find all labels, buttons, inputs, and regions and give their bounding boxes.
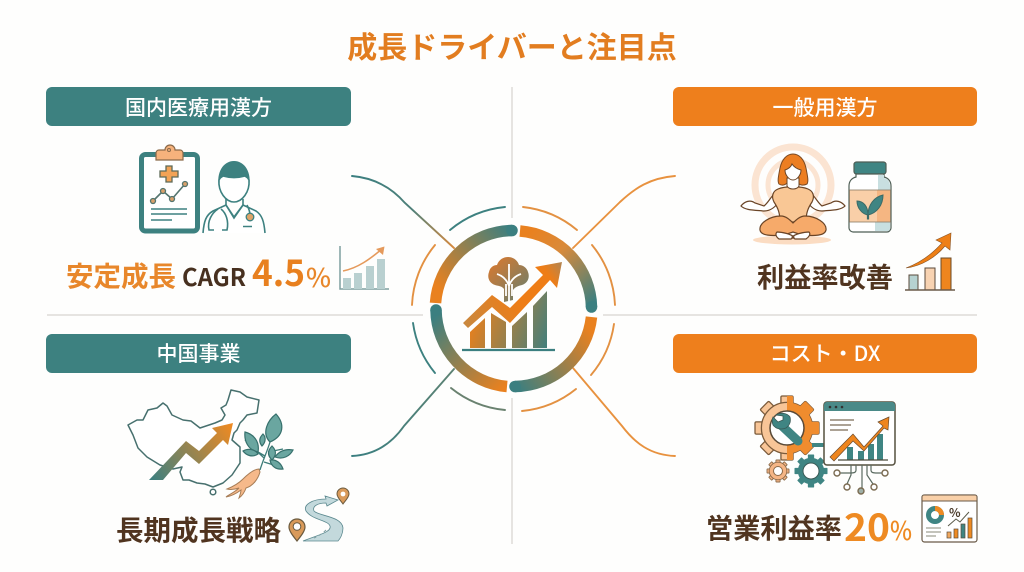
label: 利益率改善: 利益率改善: [757, 255, 893, 295]
icon: meditating woman: [741, 147, 845, 244]
icon: road with pins: [289, 488, 349, 541]
icon: small bar chart: [340, 246, 389, 289]
main ring segments: [436, 230, 592, 386]
icon: analytics window: %: [949, 504, 961, 521]
label: 営業利益率20%: 営業利益率: [706, 506, 842, 546]
title: 成長ドライバーと注目点: [347, 23, 677, 67]
heading: コスト・DX: コスト・DX: [770, 338, 881, 368]
growth bars: [470, 291, 547, 348]
right arm: [806, 193, 845, 211]
label: 長期成長戦略: 長期成長戦略: [116, 508, 281, 548]
panel: 国内医療用漢方: [46, 87, 389, 297]
left arm: [741, 193, 780, 211]
heading: 国内医療用漢方: 国内医療用漢方: [125, 92, 272, 122]
torso: [773, 187, 813, 222]
quadrant dividers: [47, 87, 977, 544]
icon: rising arrow on map: [149, 423, 233, 480]
heading: 一般用漢方: 一般用漢方: [772, 92, 878, 122]
icon: clipboard: [142, 145, 198, 231]
label: 安定成長 CAGR 4.5%: CAGR: [182, 258, 246, 293]
icon: large gear with wrench: [755, 396, 819, 460]
legs: [760, 216, 826, 235]
connector curves: [352, 176, 675, 456]
outer arcs: [412, 207, 615, 411]
label: 安定成長 CAGR 4.5%: %: [306, 258, 331, 295]
icon: herb bottle: [849, 162, 891, 232]
label: 安定成長 CAGR 4.5%: 4.5: [252, 245, 305, 297]
icon: small gears: [767, 454, 828, 488]
icon: dashboard window with circuit: [812, 402, 895, 494]
heading: 一般用漢方: [673, 87, 977, 126]
icon: doctor: [203, 161, 265, 233]
label: 営業利益率20%: %: [890, 511, 912, 548]
label: 営業利益率20%: 20: [844, 498, 890, 552]
panel: 一般用漢方: [673, 87, 977, 295]
icon: ginseng plant: [226, 414, 293, 498]
tree icon: [488, 257, 529, 302]
heading: 中国事業: [46, 334, 351, 373]
icon: rising bars with arrow: [905, 233, 955, 290]
heading: 国内医療用漢方: [46, 87, 351, 126]
heading: 中国事業: 中国事業: [156, 338, 240, 368]
label: 安定成長 CAGR 4.5%: 安定成長: [66, 254, 176, 294]
growth arrow: [463, 262, 562, 328]
label: 安定成長 CAGR 4.5%: [66, 245, 331, 297]
label: 営業利益率20%: [706, 498, 912, 552]
heading: コスト・DX: [673, 334, 977, 373]
icon: analytics window: [922, 495, 977, 542]
center hub: ring and growth chart: [352, 176, 675, 456]
panel: コスト・DX: [673, 334, 977, 552]
icon: China map: [128, 390, 259, 495]
panel: 中国事業: [46, 334, 351, 548]
